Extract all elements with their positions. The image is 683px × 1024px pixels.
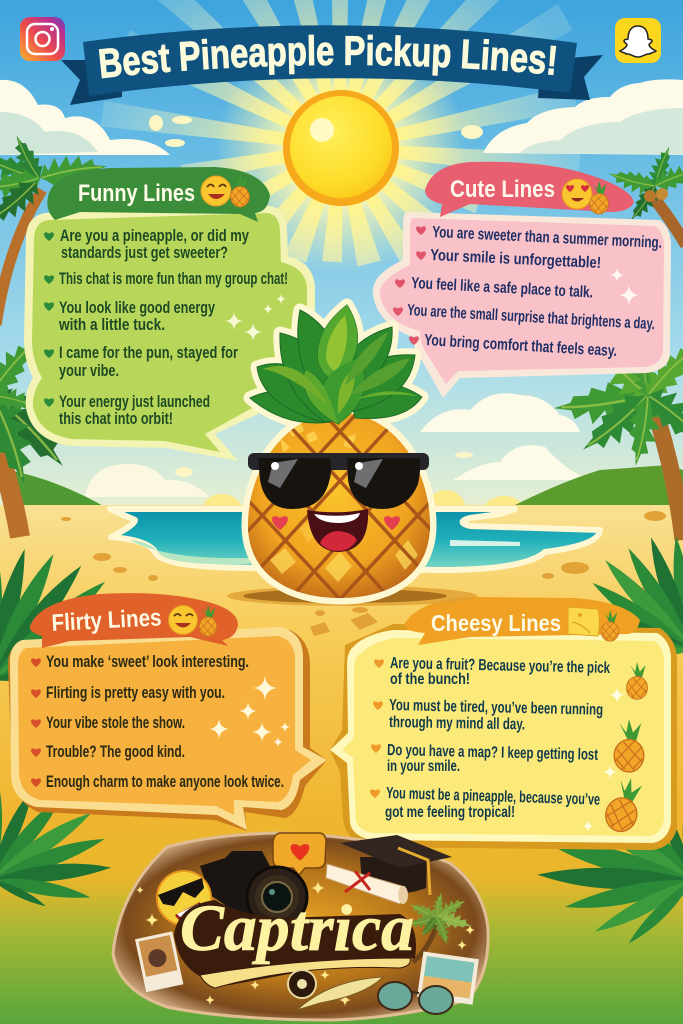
sunglasses in logo (378, 982, 453, 1014)
pineapple body (242, 414, 436, 604)
line items: flirty lines: Flirting is pretty easy with you. (46, 683, 225, 702)
ribbon heading: flirty lines: Flirty Lines (51, 604, 162, 637)
camera (200, 851, 307, 927)
sun (283, 90, 399, 206)
line items: funny lines: your vibe. (59, 361, 119, 380)
sunglasses (248, 453, 429, 509)
line items: flirty lines: Trouble? The good kind. (46, 742, 185, 761)
panel: cheesy lines (330, 597, 677, 850)
sand (0, 505, 683, 1024)
pineapple mascot (242, 298, 436, 604)
leaf highlights (263, 305, 418, 424)
line items: cheesy lines: Do you have a map? I keep getting lost (387, 742, 599, 764)
line items: funny lines (44, 226, 288, 428)
title banner (61, 25, 603, 105)
sunglasses emoji (157, 871, 211, 925)
line items: funny lines: Are you a pineapple, or did my (60, 226, 249, 245)
wordmark swoosh (200, 958, 410, 988)
sky background (0, 0, 683, 520)
fern: right lower (582, 535, 683, 660)
panel: flirty lines (8, 593, 327, 831)
sun glow (216, 23, 466, 273)
line items: flirty lines: You make ‘sweet’ look interesting. (46, 652, 249, 671)
ribbon heading: flirty lines (30, 593, 238, 648)
line items: cute lines: You bring comfort that feels easy. (424, 332, 617, 360)
logo sparkles (136, 881, 475, 1006)
line items: cheesy lines: You must be tired, you’ve been running (389, 697, 603, 719)
line items: funny lines: You look like good energy (59, 298, 215, 317)
line items: funny lines: with a little tuck. (58, 315, 165, 334)
cloud: top left (0, 80, 170, 155)
diploma (326, 864, 408, 904)
distant bush: left (8, 470, 112, 528)
ribbon heading: cute lines: Cute Lines (450, 176, 555, 203)
line items: cheesy lines: of the bunch! (390, 671, 470, 688)
crown leaves (250, 305, 422, 424)
line items: funny lines: Your energy just launched (59, 392, 210, 411)
aperture icon (288, 970, 316, 998)
horizon suns (202, 490, 524, 510)
line items: cheesy lines: got me feeling tropical! (385, 804, 515, 821)
heart speech bubble (273, 833, 326, 875)
graduation cap (340, 835, 452, 895)
line items: cheesy lines (370, 655, 610, 821)
title text: Best Pineapple Pickup Lines! (98, 34, 556, 78)
fern: bottom left (0, 786, 112, 910)
sun rays (101, 0, 580, 266)
ribbon heading: cheesy lines: Cheesy Lines (431, 610, 561, 636)
pineapple ground shadow (227, 586, 477, 606)
ribbon heading: cheesy lines (405, 597, 640, 645)
fern: bottom right (537, 796, 683, 948)
cheeks (272, 516, 400, 530)
line items: funny lines: This chat is more fun than my group chat! (59, 269, 288, 288)
palm tree: left middle (0, 330, 81, 537)
ribbon heading: cute lines (425, 162, 634, 217)
line items: cheesy lines: in your smile. (387, 758, 460, 775)
cloud: mid right (420, 393, 580, 432)
cloud: lower right (453, 445, 590, 480)
logo background blob (113, 833, 488, 1020)
sparkles: funny lines (225, 294, 286, 341)
smiling mouth (307, 509, 368, 552)
sparkles: cheesy lines (582, 687, 625, 832)
panel: funny lines (24, 167, 315, 461)
icon: instagram (20, 17, 65, 61)
photo right (417, 951, 479, 1005)
crown outline (250, 305, 422, 424)
line items: flirty lines (31, 652, 284, 791)
line items: cute lines: You feel like a safe place to talk. (411, 275, 593, 302)
wordmark: Captrica (180, 892, 414, 965)
line items: flirty lines: Enough charm to make anyone look twice. (46, 772, 284, 791)
photo left (135, 931, 183, 992)
sparkles: flirty lines (209, 676, 290, 747)
logo plate (174, 900, 416, 985)
sand pebbles (61, 511, 666, 636)
icon: snapchat (615, 18, 661, 63)
sparkles: cute lines (610, 268, 639, 305)
line items: funny lines: this chat into orbit! (59, 409, 173, 428)
cloud: top right (483, 79, 683, 155)
sea (110, 509, 600, 570)
captrica logo (113, 833, 488, 1020)
distant hill: right (505, 465, 683, 510)
line items: flirty lines: Your vibe stole the show. (46, 713, 185, 732)
feather (297, 977, 383, 1010)
line items: funny lines: standards just get sweeter? (61, 243, 228, 262)
line items: cute lines (393, 224, 662, 360)
fern: left lower (0, 547, 116, 687)
line items: cute lines: Your smile is unforgettable! (430, 247, 601, 272)
cloud: lower left (85, 464, 210, 497)
palm in logo (407, 891, 474, 962)
palm tree: left top (0, 131, 109, 325)
ribbon heading: funny lines (47, 167, 270, 222)
panel: cute lines (373, 162, 671, 398)
palm tree: right top (605, 143, 683, 245)
icons: small pineapples (602, 662, 647, 835)
line items: funny lines: I came for the pun, stayed for (59, 343, 238, 362)
palm tree: right middle (551, 328, 683, 540)
ribbon heading: funny lines: Funny Lines (78, 180, 195, 207)
small sky puffs (149, 115, 483, 477)
line items: cheesy lines: through my mind all day. (389, 714, 525, 733)
